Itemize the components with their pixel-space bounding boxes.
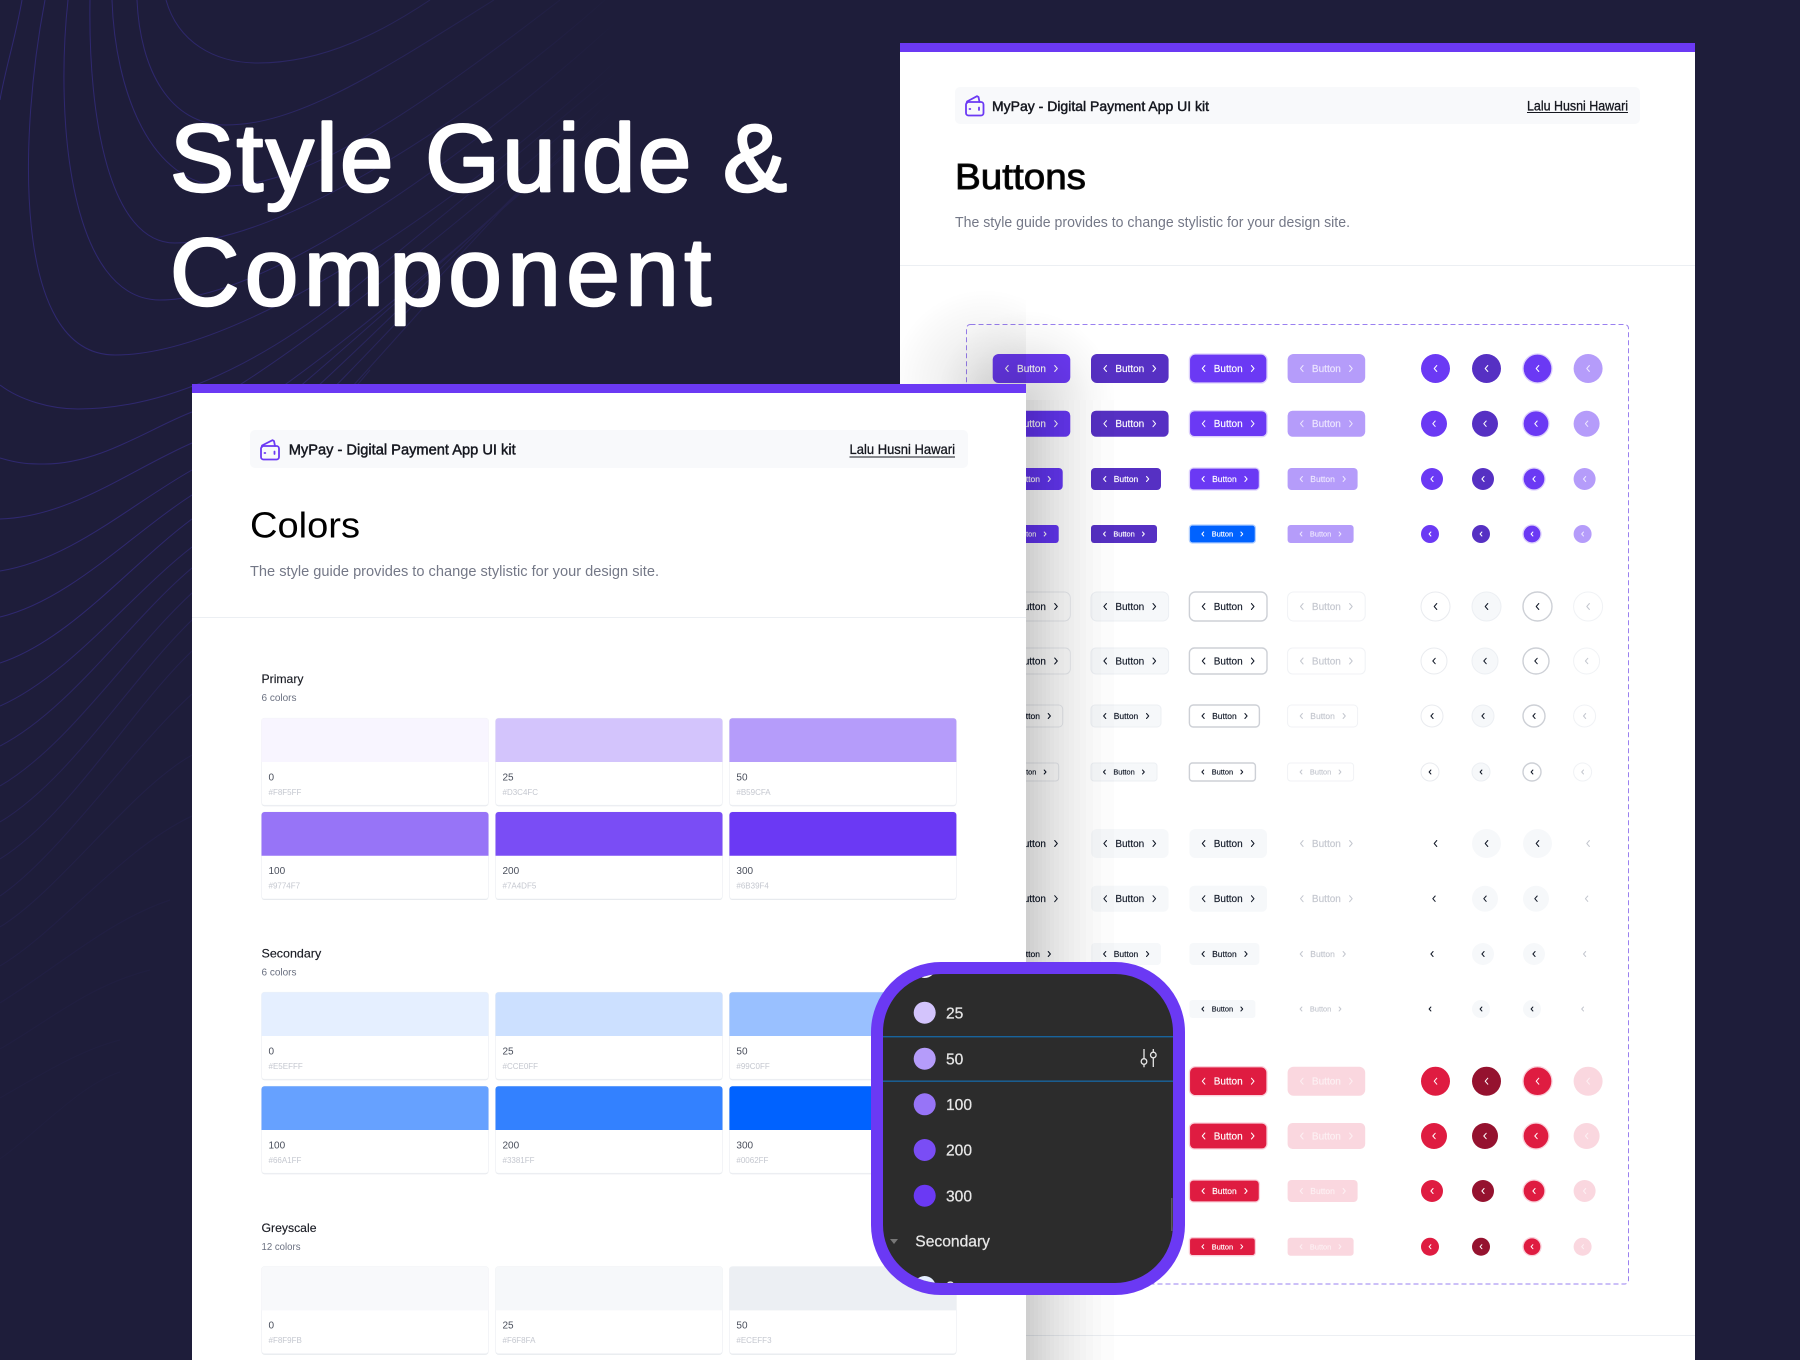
swatch: secondary 0: #E5EFFF	[268, 1062, 303, 1071]
swatch: primary 50: 50	[736, 772, 748, 783]
title: Style Guide &	[170, 105, 787, 212]
swatch: secondary 25	[496, 992, 722, 1080]
buttons: ghost extra small: Button	[1113, 1005, 1135, 1014]
icon: wallet	[966, 96, 984, 116]
buttons: outline large: Button	[1312, 602, 1341, 613]
buttons: outline small: Button	[1015, 711, 1040, 721]
buttons: danger medium: Button	[1115, 1132, 1144, 1142]
buttons: outline small	[993, 705, 1596, 727]
buttons: danger extra small: Button	[1113, 1242, 1135, 1251]
buttons: outline small: Button	[1212, 711, 1237, 721]
panel: colors style guide	[192, 384, 1026, 1360]
section: Secondary: 6 colors	[262, 968, 296, 978]
buttons: danger large	[993, 1067, 1603, 1096]
buttons: primary large: Button	[1017, 364, 1046, 375]
section row: Secondary: Secondary	[915, 1234, 990, 1250]
swatch: secondary 50: #99C0FF	[736, 1062, 770, 1071]
buttons: primary medium	[993, 411, 1600, 437]
buttons: primary large: Button	[1312, 364, 1341, 375]
title: Component	[170, 219, 711, 326]
buttons: ghost large: Button	[1115, 839, 1144, 850]
description: buttons: The style guide provides to change stylistic for your design site.	[955, 215, 1350, 231]
swatch: greyscale 50	[729, 1267, 956, 1355]
callout: color styles popup: 0	[946, 1280, 955, 1296]
swatch: secondary 300	[729, 1086, 956, 1174]
swatch: primary 200: #7A4DF5	[502, 882, 537, 890]
section: Greyscale: 12 colors	[262, 1242, 300, 1253]
buttons: danger medium: Button	[1017, 1132, 1046, 1142]
buttons: outline small: Button	[1114, 711, 1139, 721]
swatch: primary 300: 300	[736, 866, 754, 877]
swatch: secondary 0	[262, 992, 488, 1080]
buttons: primary small: Button	[1015, 474, 1040, 484]
buttons: danger large: Button	[1017, 1077, 1046, 1088]
buttons: primary medium: Button	[1115, 419, 1144, 430]
title	[170, 105, 787, 326]
swatch: secondary 50: 50	[736, 1046, 748, 1057]
description: colors: The style guide provides to change stylistic for your design site.	[250, 563, 659, 580]
swatch: secondary 300: #0062FF	[736, 1156, 769, 1165]
swatch row: 300: 300	[946, 1188, 972, 1205]
buttons: ghost small	[993, 943, 1596, 965]
swatch: primary 25	[496, 718, 722, 806]
buttons: ghost large: Button	[1214, 839, 1243, 850]
swatch: greyscale 50: #ECEFF3	[736, 1336, 772, 1345]
callout: color styles popup	[877, 956, 1179, 1298]
swatch: secondary 100	[262, 1086, 488, 1174]
buttons: outline extra small: Button	[1015, 768, 1036, 777]
buttons: primary small: Button	[1310, 474, 1335, 484]
buttons: ghost large	[993, 829, 1603, 858]
buttons: danger extra small: Button	[1015, 1242, 1036, 1251]
buttons: primary extra small: Button	[1310, 530, 1331, 539]
background contour lines	[0, 0, 750, 1159]
swatch: primary 200: 200	[502, 866, 520, 877]
header bar: colors panel: MyPay - Digital Payment App UI kit	[289, 442, 516, 458]
swatch: secondary 25: #CCE0FF	[502, 1062, 538, 1071]
button grid	[993, 354, 1603, 1256]
buttons: primary small: Button	[1212, 474, 1237, 484]
buttons: ghost small: Button	[1114, 949, 1139, 959]
icon: wallet	[261, 440, 279, 460]
buttons: outline medium: Button	[1312, 656, 1341, 668]
buttons: danger small	[993, 1180, 1596, 1202]
buttons: primary medium: Button	[1017, 419, 1046, 430]
buttons: danger medium	[993, 1123, 1600, 1149]
buttons: ghost extra small: Button	[1015, 1005, 1036, 1014]
buttons: outline extra small: Button	[1310, 768, 1331, 777]
buttons: ghost medium	[993, 886, 1600, 912]
swatch: greyscale 25	[496, 1267, 722, 1355]
swatch: primary 100: #9774F7	[268, 882, 301, 890]
buttons: primary large: Button	[1115, 364, 1144, 375]
buttons: ghost small: Button	[1212, 949, 1237, 959]
swatch row: 50 (selected)	[914, 1048, 964, 1070]
buttons: ghost medium: Button	[1214, 894, 1243, 905]
section: Greyscale	[262, 1221, 956, 1355]
buttons: primary large	[993, 354, 1603, 383]
header bar: buttons panel	[955, 87, 1640, 124]
buttons: danger large: Button	[1115, 1077, 1144, 1088]
section: Greyscale: Greyscale	[262, 1221, 317, 1235]
section: Primary: Primary	[262, 672, 304, 686]
buttons: danger medium: Button	[1214, 1132, 1243, 1142]
swatch: secondary 100: 100	[268, 1140, 286, 1151]
buttons: primary extra small: Button	[1212, 530, 1233, 539]
swatch: secondary 300: 300	[736, 1140, 754, 1151]
buttons: primary extra small: Button	[1015, 530, 1036, 539]
swatch: greyscale 25: #F6F8FA	[502, 1336, 536, 1345]
buttons: primary small	[993, 468, 1596, 490]
buttons: primary small: Button	[1114, 474, 1139, 484]
section: Primary	[262, 672, 956, 900]
swatch: secondary 100: #66A1FF	[268, 1156, 302, 1165]
swatch: primary 100: 100	[268, 866, 286, 877]
buttons: outline medium: Button	[1214, 656, 1243, 668]
section: Secondary: Secondary	[262, 946, 321, 960]
swatch row: 200: 200	[946, 1143, 972, 1160]
buttons: outline large	[993, 592, 1603, 621]
buttons: ghost medium: Button	[1312, 894, 1341, 905]
soft shadow cast by colors panel	[900, 280, 1116, 1360]
swatch: greyscale 50: 50	[736, 1321, 748, 1332]
buttons: ghost small: Button	[1310, 949, 1335, 959]
swatch: secondary 25: 25	[502, 1046, 514, 1057]
buttons: ghost extra small: Button	[1212, 1005, 1233, 1014]
swatch: greyscale 0: #F8F9FB	[268, 1336, 302, 1345]
swatch: secondary 200: 200	[502, 1140, 520, 1151]
buttons: danger extra small: Button	[1212, 1242, 1233, 1251]
swatch: primary 25: #D3C4FC	[502, 788, 538, 797]
swatch: secondary 0: 0	[268, 1046, 274, 1057]
buttons: danger large: Button	[1312, 1077, 1341, 1088]
buttons: ghost small: Button	[1015, 949, 1040, 959]
swatch: primary 50	[729, 718, 956, 806]
heading: Colors: Colors	[250, 504, 360, 546]
swatch row: 25	[914, 1002, 964, 1024]
swatch: primary 300	[729, 812, 956, 900]
buttons: danger small: Button	[1114, 1186, 1139, 1196]
swatch: greyscale 0	[262, 1267, 488, 1355]
section: Primary: 6 colors	[262, 693, 296, 704]
buttons: outline medium: Button	[1017, 656, 1046, 668]
swatch: primary 200	[496, 812, 722, 900]
buttons: primary medium: Button	[1214, 419, 1243, 430]
panel: buttons style guide	[900, 43, 1695, 1360]
buttons: danger extra small: Button	[1310, 1242, 1331, 1251]
swatch: primary 300: #6B39F4	[736, 882, 769, 890]
buttons: outline extra small: Button	[1113, 768, 1135, 777]
swatch row: 100: 100	[946, 1097, 972, 1114]
swatch: primary 0: 0	[268, 772, 274, 783]
buttons: outline large: Button	[1214, 602, 1243, 613]
swatch: primary 50: #B59CFA	[736, 788, 771, 797]
swatch: secondary 200	[496, 1086, 722, 1174]
swatch: secondary 200: #3381FF	[502, 1156, 535, 1165]
buttons: outline medium	[993, 648, 1600, 674]
swatch: greyscale 25: 25	[502, 1321, 514, 1332]
swatch: primary 0	[262, 718, 488, 806]
buttons: ghost large: Button	[1017, 839, 1046, 850]
buttons: ghost large: Button	[1312, 839, 1341, 850]
swatch: primary 0: #F8F5FF	[268, 788, 302, 797]
swatch row: 50 (selected): 50	[946, 1052, 964, 1068]
heading: Buttons: Buttons	[955, 156, 1086, 197]
swatch: primary 25: 25	[502, 772, 514, 783]
buttons: outline extra small	[993, 763, 1592, 781]
buttons: outline extra small: Button	[1212, 768, 1233, 777]
buttons: primary extra small	[993, 525, 1592, 543]
swatch row: 100	[914, 1093, 972, 1115]
swatch: greyscale 0: 0	[268, 1321, 274, 1332]
dashed component frame	[966, 324, 1628, 1284]
swatch: secondary 50	[729, 992, 956, 1080]
swatch row: 200	[914, 1139, 972, 1161]
buttons: danger extra small	[993, 1238, 1592, 1256]
buttons: outline medium: Button	[1115, 656, 1144, 668]
buttons: danger small: Button	[1212, 1186, 1237, 1196]
buttons: outline small: Button	[1310, 711, 1335, 721]
buttons: primary large: Button	[1214, 364, 1243, 375]
buttons: ghost medium: Button	[1017, 894, 1046, 905]
swatch row: 300	[914, 1185, 972, 1207]
buttons: ghost medium: Button	[1115, 894, 1144, 905]
buttons: primary medium: Button	[1312, 419, 1341, 430]
header bar: buttons panel: MyPay - Digital Payment App UI kit	[992, 98, 1209, 114]
buttons: outline large: Button	[1017, 602, 1046, 613]
buttons: ghost extra small: Button	[1310, 1005, 1331, 1014]
buttons: primary extra small: Button	[1113, 530, 1135, 539]
swatch row: 25: 25	[946, 1006, 964, 1022]
icon: adjust sliders	[1141, 1049, 1156, 1067]
swatch: primary 100	[262, 812, 488, 900]
buttons: danger small: Button	[1310, 1186, 1335, 1196]
buttons: ghost extra small	[993, 1000, 1592, 1018]
header bar: colors panel: Lalu Husni Hawari	[850, 441, 955, 457]
section: Secondary	[262, 946, 956, 1174]
header bar: buttons panel: Lalu Husni Hawari	[1527, 98, 1628, 114]
buttons: danger medium: Button	[1312, 1132, 1341, 1142]
header bar: colors panel	[250, 430, 968, 468]
buttons: danger small: Button	[1015, 1186, 1040, 1196]
buttons: danger large: Button	[1214, 1077, 1243, 1088]
buttons: outline large: Button	[1115, 602, 1144, 613]
